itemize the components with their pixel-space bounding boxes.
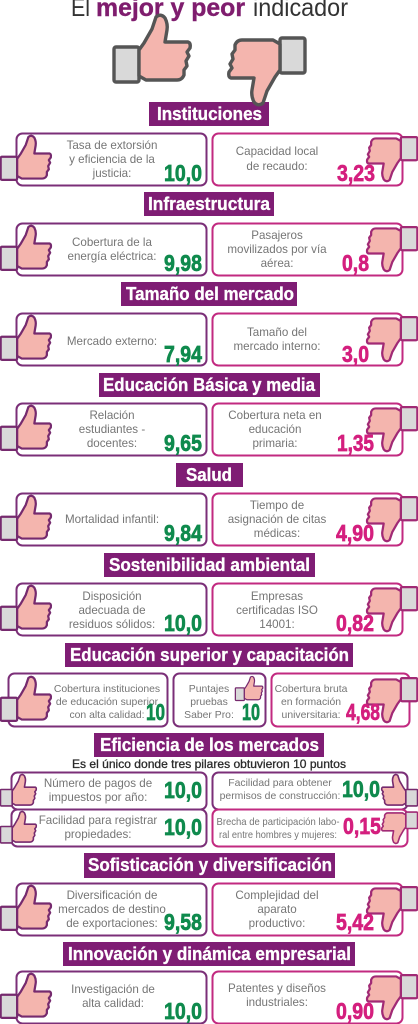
panel: worst Sostenibilidad — [212, 584, 417, 636]
panel: worst Innovación: Patentes y diseños — [228, 982, 326, 995]
section: Eficiencia de los mercados — [0, 733, 418, 846]
panel: best Salud: Mortalidad infantil: — [65, 513, 159, 526]
panel: best Infraestructura: energía eléctrica: — [68, 250, 156, 263]
heading: Instituciones: Instituciones — [157, 104, 262, 124]
panel: Cobertura instituciones: con alta calidad: — [69, 710, 145, 721]
panel: Número de pagos: 10,0 — [164, 777, 202, 803]
panel: worst Infraestructura: Pasajeros — [251, 229, 303, 242]
panel: Brecha de participación — [212, 810, 418, 846]
panel: worst Tamaño: mercado interno: — [234, 340, 320, 353]
panel: best Innovación: Investigación de — [71, 983, 155, 996]
panel: best Infraestructura — [1, 224, 206, 276]
panel: best Infraestructura: 9,98 — [164, 250, 202, 276]
heading: Tamaño del mercado: Tamaño del mercado — [126, 284, 294, 304]
panel: worst Sofisticación: 5,42 — [336, 909, 374, 935]
panel: Cobertura bruta: universitaria: — [282, 710, 340, 721]
panel: Facilidad permisos: permisos de construcción: — [220, 791, 340, 802]
title — [71, 0, 348, 22]
panel: worst Instituciones: de recaudo: — [246, 160, 308, 173]
section: Salud — [1, 463, 417, 546]
panel: worst Sostenibilidad: 14001: — [259, 618, 295, 631]
panel: Facilidad registrar: 10,0 — [164, 814, 202, 840]
heading: Infraestructura: Infraestructura — [148, 194, 271, 214]
panel: best Salud — [1, 494, 206, 546]
panel: worst Salud: Tiempo de — [250, 499, 304, 512]
panel: Cobertura bruta: Cobertura bruta — [275, 684, 348, 695]
panel: best Educación Básica: docentes: — [87, 437, 137, 450]
panel: Cobertura instituciones: de educación superior — [56, 697, 159, 708]
heading: Salud: Salud — [186, 465, 232, 485]
section: Sostenibilidad ambiental — [1, 553, 417, 636]
panel: worst Infraestructura: movilizados por vía — [227, 243, 327, 256]
panel: worst Sostenibilidad: Empresas — [251, 590, 303, 603]
panel: best Innovación: alta calidad: — [82, 997, 144, 1010]
panel: worst Salud: 4,90 — [336, 520, 374, 546]
heading: Salud — [176, 463, 243, 487]
heading: Sostenibilidad ambiental: Sostenibilidad ambiental — [109, 555, 310, 575]
panel: best Instituciones: Tasa de extorsión — [67, 139, 157, 152]
panel: worst Instituciones: Capacidad local — [236, 145, 318, 158]
panel: best Educación Básica: Relación — [89, 409, 135, 422]
panel: worst Instituciones: 3,23 — [337, 160, 375, 186]
panel: worst Salud: asignación de citas — [228, 513, 327, 526]
panel: Puntajes Saber Pro — [174, 674, 266, 726]
panel: worst Educación Básica: primaria: — [252, 437, 298, 450]
panel: worst Infraestructura: aérea: — [261, 257, 293, 270]
panel: worst Educación Básica: Cobertura neta en — [228, 409, 322, 422]
heading: Innovación y dinámica empresarial: Innovación y dinámica empresarial — [68, 944, 351, 964]
panel: best Salud: 9,84 — [164, 520, 202, 546]
panel: Cobertura instituciones: 10 — [146, 699, 165, 725]
panel: Puntajes Saber Pro: Puntajes — [189, 684, 229, 695]
panel: worst Innovación: 0,90 — [336, 998, 374, 1024]
panel: Cobertura bruta — [272, 674, 417, 726]
panel: best Educación Básica — [1, 404, 206, 456]
section: Educación Básica y media — [1, 373, 417, 456]
panel: best Sostenibilidad: 10,0 — [164, 610, 202, 636]
section: Tamaño del mercado — [1, 282, 417, 367]
panel: worst Innovación: industriales: — [246, 996, 308, 1009]
panel: Cobertura bruta: 4,68 — [346, 699, 380, 725]
panel: best Sostenibilidad: residuos sólidos: — [69, 618, 155, 631]
panel: Número de pagos: Número de pagos de — [44, 777, 152, 790]
panel: worst Sofisticación — [212, 884, 417, 936]
panel: worst Tamaño: Tamaño del — [247, 326, 307, 339]
panel: worst Educación Básica: educación — [249, 423, 301, 436]
panel: Cobertura instituciones — [1, 674, 167, 726]
panel: best Innovación: 10,0 — [164, 998, 202, 1024]
panel: Puntajes Saber Pro: 10 — [242, 699, 260, 725]
panel: best Tamaño: Mercado externo: — [67, 335, 157, 348]
panel: worst Sofisticación: aparato — [257, 903, 297, 916]
panel: Puntajes Saber Pro: Saber Pro: — [184, 710, 234, 721]
panel: Facilidad permisos: Facilidad para obtener — [228, 778, 332, 789]
panel: best Sostenibilidad: adecuada de — [78, 604, 146, 617]
section: Infraestructura — [1, 192, 417, 276]
panel: best Instituciones: y eficiencia de la — [69, 153, 155, 166]
section: Instituciones — [1, 102, 417, 186]
panel: worst Tamaño: 3,0 — [342, 341, 369, 367]
heading: Eficiencia de los mercados: Eficiencia de los mercados — [100, 735, 319, 755]
panel: Brecha de participación: 0,15 — [343, 813, 381, 839]
panel: worst Infraestructura — [212, 224, 417, 276]
panel: worst Infraestructura: 0,8 — [342, 250, 369, 276]
panel: Facilidad registrar — [0, 810, 206, 846]
panel: best Educación Básica: estudiantes - — [79, 423, 145, 436]
panel: worst Instituciones — [212, 134, 417, 186]
panel: best Instituciones: 10,0 — [164, 160, 202, 186]
panel: worst Educación Básica: 1,35 — [337, 430, 374, 456]
panel: best Sostenibilidad: Disposición — [82, 590, 142, 603]
panel: worst Salud: médicas: — [254, 527, 300, 540]
panel: Facilidad registrar: Facilidad para registrar — [39, 814, 157, 827]
panel: best Instituciones: justicia: — [92, 167, 131, 180]
icon: big thumb up — [114, 15, 190, 82]
section: Educación superior y capacitación — [1, 643, 417, 726]
panel: Brecha de participación: Brecha de participación labo- — [216, 817, 340, 828]
panel: Facilidad permisos: 10,0 — [342, 776, 380, 802]
panel: best Sofisticación: de exportaciones: — [66, 917, 158, 930]
heading: Educación superior y capacitación: Educación superior y capacitación — [70, 645, 349, 665]
panel: best Tamaño — [1, 314, 206, 367]
panel: Facilidad registrar: propiedades: — [64, 828, 132, 841]
section: Innovación y dinámica empresarial — [1, 942, 417, 1024]
panel: best Instituciones — [1, 134, 206, 186]
panel: worst Sostenibilidad: certificadas ISO — [236, 604, 318, 617]
panel: Brecha de participación: ral entre hombres y mujeres: — [219, 830, 337, 841]
panel: Cobertura bruta: en formación — [281, 697, 341, 708]
panel: best Sofisticación: 9,58 — [164, 909, 202, 935]
panel: Número de pagos: impuestos por año: — [49, 791, 147, 804]
panel: best Infraestructura: Cobertura de la — [72, 236, 153, 249]
panel: worst Tamaño — [212, 314, 417, 367]
subtitle: Es el único donde tres pilares obtuvieron 10 puntos — [72, 757, 346, 771]
panel: best Sostenibilidad — [1, 584, 206, 636]
panel: best Educación Básica: 9,65 — [164, 430, 202, 456]
panel: best Sofisticación: mercados de destino — [58, 903, 166, 916]
panel: worst Educación Básica — [212, 404, 417, 456]
panel: Puntajes Saber Pro: pruebas — [190, 697, 228, 708]
panel: Cobertura instituciones: Cobertura instituciones — [54, 684, 160, 695]
panel: Facilidad permisos — [212, 772, 418, 810]
panel: best Innovación — [1, 972, 206, 1024]
panel: worst Sostenibilidad: 0,82 — [336, 610, 374, 636]
heading: Sofisticación y diversificación: Sofisticación y diversificación — [88, 855, 332, 875]
panel: worst Innovación — [212, 972, 417, 1024]
panel: worst Sofisticación: Complejidad del — [235, 889, 319, 902]
heading: Educación Básica y media: Educación Básica y media — [103, 375, 316, 395]
section: Sofisticación y diversificación — [1, 853, 417, 936]
icon: big thumb down — [229, 38, 305, 105]
panel: worst Salud — [212, 494, 417, 546]
panel: best Tamaño: 7,94 — [164, 341, 202, 367]
panel: Número de pagos — [0, 772, 206, 810]
panel: best Sofisticación — [1, 884, 206, 936]
panel: worst Sofisticación: productivo: — [249, 917, 305, 930]
panel: best Sofisticación: Diversificación de — [67, 889, 157, 902]
